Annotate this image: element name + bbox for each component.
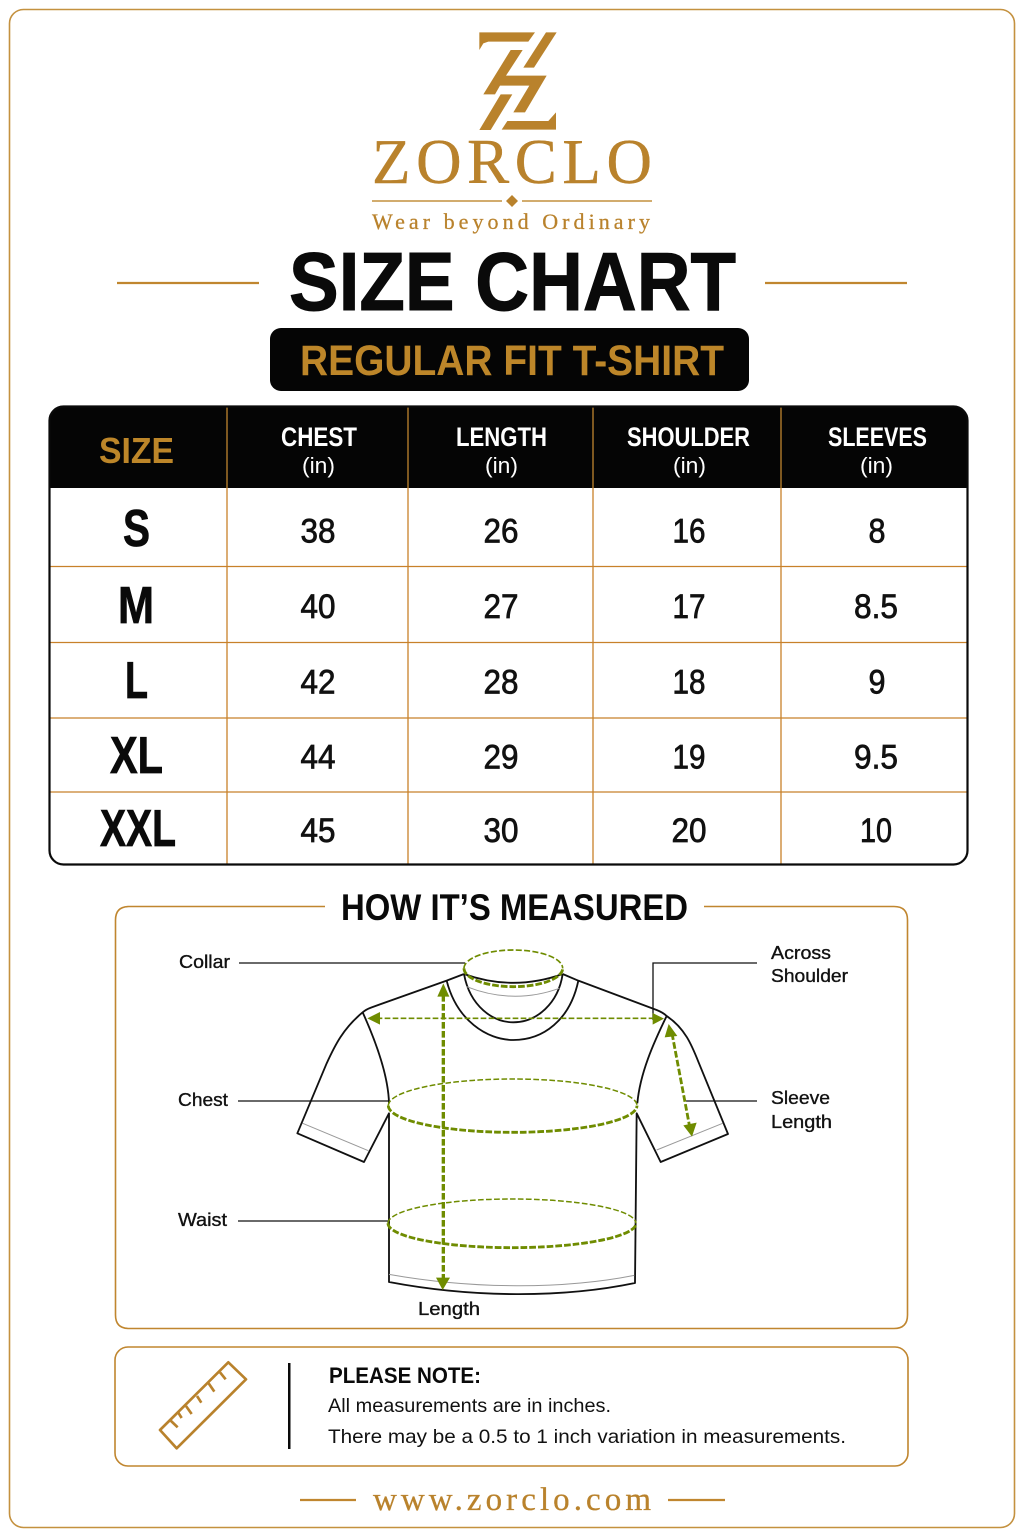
row XXL: XXL — [100, 800, 176, 858]
note text — [328, 1395, 846, 1448]
row M: 8.5 — [854, 588, 898, 626]
row M: M — [118, 577, 154, 635]
row XXL: 30 — [484, 812, 518, 850]
note text: There may be a 0.5 to 1 inch variation in measurements. — [328, 1426, 846, 1448]
title: SIZE CHART — [289, 235, 736, 328]
row L: 28 — [484, 664, 518, 702]
note text: All measurements are in inches. — [328, 1395, 611, 1417]
row L: 9 — [868, 664, 886, 702]
table header: (in) — [485, 453, 518, 478]
arrow: across shoulder — [367, 1012, 664, 1025]
wordmark: ZORCLO — [372, 127, 652, 197]
icon: diamond — [506, 195, 518, 207]
arrow: length — [436, 983, 450, 1290]
logo divider — [372, 200, 652, 202]
row M: 27 — [484, 588, 518, 626]
tagline: Wear beyond Ordinary — [372, 209, 650, 234]
panel: how it's measured — [116, 887, 908, 1328]
row S: 16 — [672, 512, 706, 550]
row XL: 9.5 — [854, 738, 898, 776]
table header: LENGTH — [456, 422, 547, 452]
row XXL — [100, 800, 892, 858]
t-shirt diagram — [297, 950, 728, 1294]
row L: 42 — [300, 664, 336, 702]
label: sleeve length — [771, 1087, 832, 1132]
row L — [125, 652, 886, 710]
label: sleeve length: Length — [771, 1111, 832, 1132]
row M — [118, 577, 898, 635]
table header: (in) — [302, 453, 335, 478]
waist measure — [388, 1199, 636, 1248]
table header: (in) — [673, 453, 706, 478]
row XXL: 45 — [300, 812, 336, 850]
icon: Z monogram — [479, 32, 557, 130]
label: chest: Chest — [178, 1089, 228, 1110]
row XL: XL — [110, 727, 163, 785]
label: across shoulder — [771, 942, 848, 986]
row S: 38 — [300, 512, 336, 550]
leader lines — [238, 963, 757, 1221]
label: sleeve length: Sleeve — [771, 1087, 830, 1108]
note heading: PLEASE NOTE: — [329, 1363, 481, 1388]
table header: (in) — [860, 453, 893, 478]
size table — [50, 406, 968, 864]
row S: 8 — [868, 512, 886, 550]
row XL — [110, 727, 898, 785]
table header: CHEST — [281, 422, 357, 452]
row S: 26 — [484, 512, 518, 550]
subtitle badge: REGULAR FIT T-SHIRT — [300, 337, 724, 385]
row L: 18 — [672, 664, 706, 702]
row L: L — [125, 652, 148, 710]
panel heading: HOW IT’S MEASURED — [341, 887, 688, 928]
row M: 40 — [300, 588, 336, 626]
chest measure — [388, 1079, 637, 1132]
seam lines — [303, 987, 723, 1286]
shirt outline — [297, 974, 728, 1294]
label: across shoulder: Across — [771, 942, 831, 963]
panel: please note — [115, 1347, 908, 1466]
label: waist: Waist — [178, 1209, 227, 1230]
row XXL: 20 — [672, 812, 706, 850]
label: across shoulder: Shoulder — [771, 965, 848, 986]
subtitle badge — [270, 328, 749, 391]
table header: SIZE — [99, 430, 174, 471]
row S: S — [123, 500, 150, 558]
table header — [50, 407, 967, 488]
table header: SLEEVES — [828, 422, 927, 452]
row XL: 44 — [300, 738, 336, 776]
arrow: sleeve length — [665, 1024, 697, 1137]
row M: 17 — [672, 588, 706, 626]
collar measure — [464, 950, 563, 987]
label: collar: Collar — [179, 951, 230, 972]
note divider — [288, 1363, 290, 1449]
row XL: 19 — [672, 738, 706, 776]
footer website: www.zorclo.com — [373, 1482, 651, 1518]
row XXL: 10 — [860, 812, 892, 850]
row S — [123, 500, 886, 558]
label: length: Length — [418, 1298, 480, 1319]
table header: SHOULDER — [627, 422, 750, 452]
logo: Zorclo brand — [372, 32, 652, 234]
row XL: 29 — [484, 738, 518, 776]
icon: ruler — [160, 1362, 246, 1448]
